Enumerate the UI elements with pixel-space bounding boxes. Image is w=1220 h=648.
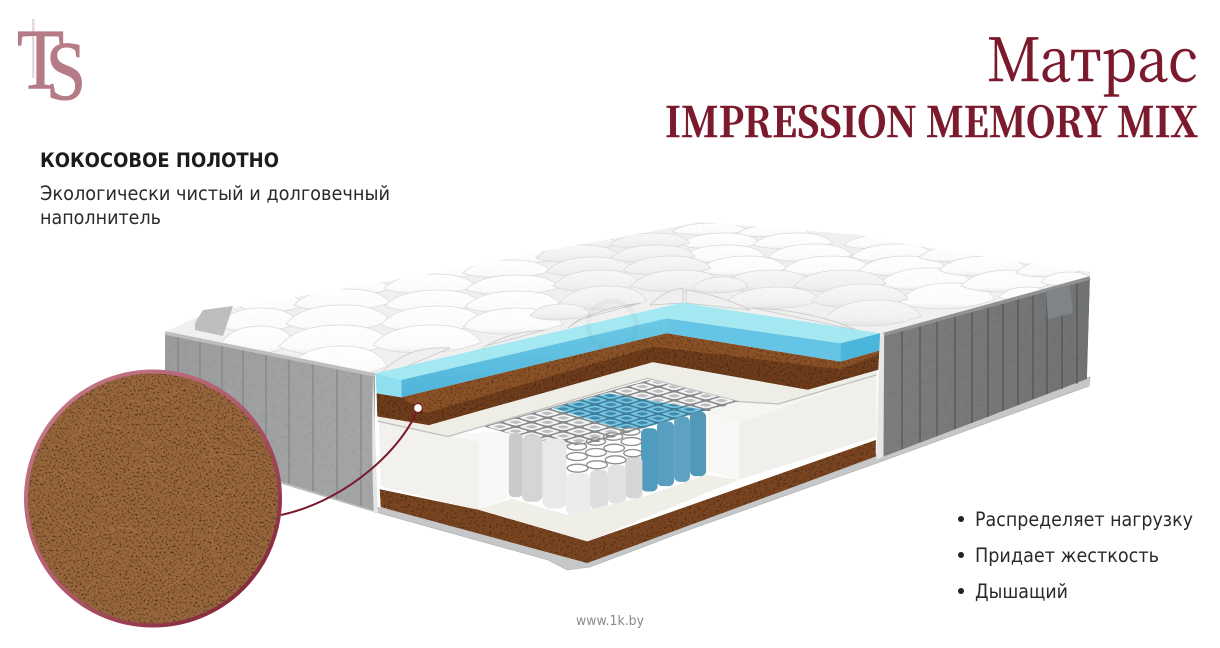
benefits list: [958, 508, 1193, 603]
layer: coconut top: [377, 333, 879, 425]
logo: TS monogram: S: [46, 25, 86, 118]
callout line with dot: [281, 404, 422, 515]
coconut fibres: [40, 390, 250, 590]
layer: memory foam, blue: [375, 303, 880, 397]
benefits list: Дышащий: [975, 580, 1068, 603]
layer: lower white sheet: [479, 475, 739, 541]
layer: coconut bottom: [380, 440, 876, 563]
text block: coconut layer description: КОКОСОВОЕ ПОЛОТНО: [40, 149, 279, 172]
spring block: tops grid: [484, 380, 739, 447]
cover strips: [372, 333, 884, 514]
quilted top surface: [165, 222, 1093, 378]
label tag: left: [195, 306, 233, 336]
layer: white latex foam frame: [378, 362, 877, 510]
label tag: right: [1046, 285, 1073, 319]
coconut fibre zoom circle: [26, 372, 280, 626]
pocket springs: white and blue columns: [509, 412, 706, 515]
text block: coconut layer description: Экологически чистый и долговечный: [40, 182, 390, 205]
logo: TS monogram: [17, 11, 86, 118]
right side fabric panel: [880, 278, 1090, 458]
text block: coconut layer description: [40, 149, 390, 229]
watermark: [588, 301, 636, 349]
title: [665, 13, 1198, 150]
mattress illustration: [165, 222, 1093, 570]
cut-away section with inner layers: [372, 303, 884, 563]
benefits list: Распределяет нагрузку: [975, 508, 1193, 531]
logo: TS monogram: T: [17, 11, 64, 107]
text block: coconut layer description: наполнитель: [40, 206, 161, 229]
coil springs: [567, 428, 642, 472]
title: Матрас: [987, 13, 1198, 99]
website caption: www.1k.by: [576, 614, 644, 629]
left side fabric panel: [165, 333, 375, 511]
cut pillow lenses along the cut: [380, 288, 857, 376]
benefits list: Придает жесткость: [975, 544, 1159, 567]
bottom trim of mattress: [165, 377, 1090, 570]
